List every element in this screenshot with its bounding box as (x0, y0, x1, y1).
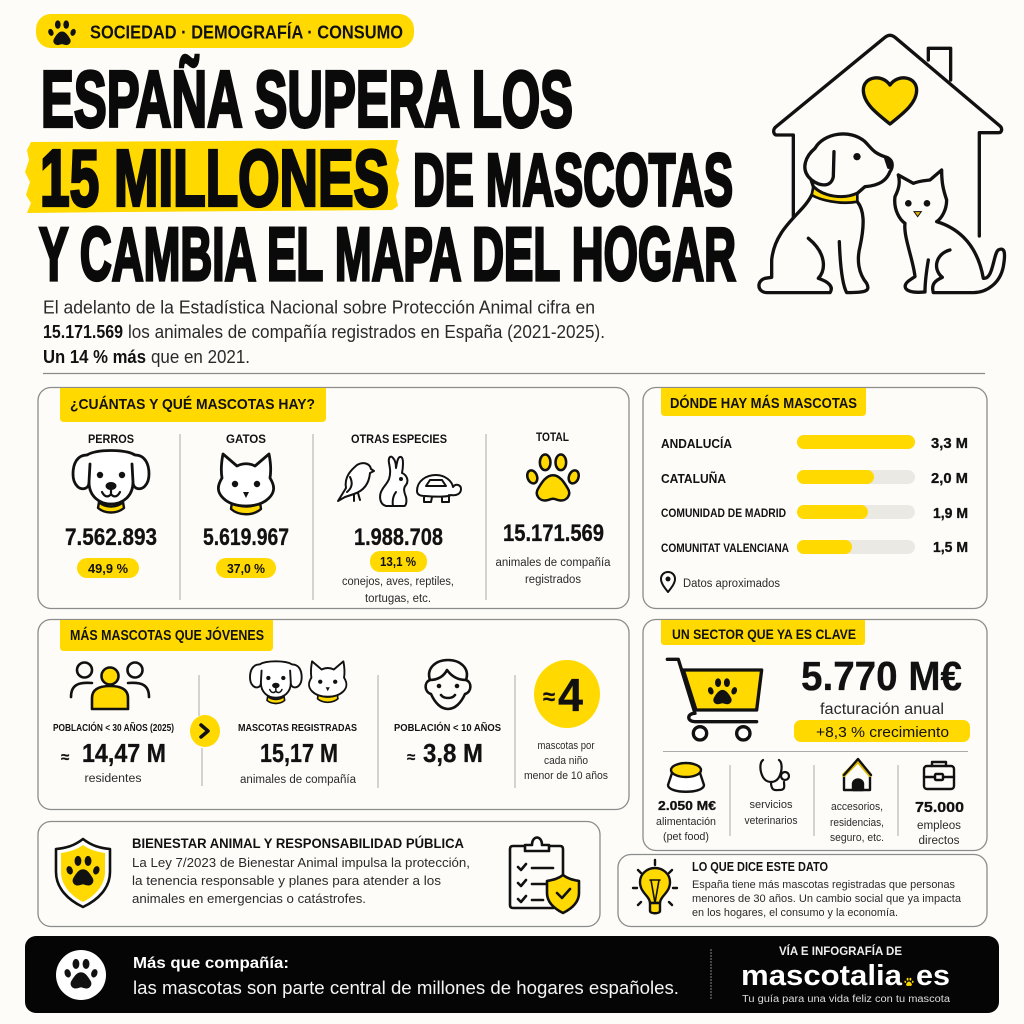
callout: about 4 pets per child: 4 (558, 669, 583, 721)
icon: paw (47, 20, 77, 45)
panel: bienestar animal (38, 822, 600, 926)
arrow: greater than (190, 715, 220, 747)
icon: small yellow paw (904, 978, 914, 986)
column: otras especies: 13,1 % (380, 554, 416, 569)
panel heading: ¿CUÁNTAS Y QUÉ MASCOTAS HAY? (70, 396, 315, 413)
icon: shield with paw (56, 839, 110, 907)
callout: about 4 pets per child (524, 660, 608, 782)
bar: Comunitat Valenciana: COMUNITAT VALENCIANA (661, 543, 789, 555)
column: gatos: 37,0 % (227, 561, 265, 576)
item: alimentación: (pet food) (663, 831, 709, 843)
panel heading: MÁS MASCOTAS QUE JÓVENES (70, 626, 264, 644)
bar: Comunitat Valenciana: 1,5 M (933, 540, 968, 556)
footer message (133, 955, 679, 998)
column: otras especies: conejos, aves, reptiles, (342, 576, 454, 588)
footer message: las mascotas son parte central de millones de hogares españoles. (133, 978, 679, 998)
bar: Cataluña: 2,0 M (931, 471, 968, 487)
text block: animales en emergencias o catástrofes. (132, 891, 366, 906)
column: otras especies (338, 432, 461, 605)
text block: La Ley 7/2023 de Bienestar Animal impulsa la protección, (132, 855, 470, 870)
title line 2 highlighted: 15 MILLONES (40, 134, 389, 222)
item: alimentación: 2.050 M€ (658, 798, 716, 813)
icon: boy face (426, 660, 470, 709)
bar: Comunitat Valenciana (661, 540, 968, 556)
note: approximate data: Datos aproximados (683, 578, 780, 590)
item: accesorios: seguro, etc. (830, 832, 884, 844)
column: población menor de 30 (53, 662, 174, 785)
panel heading: UN SECTOR QUE YA ES CLAVE (672, 626, 856, 642)
item: accesorios (830, 759, 884, 844)
column: población menor de 30: 14,47 M (82, 738, 166, 768)
bar: Comunidad de Madrid: COMUNIDAD DE MADRID (661, 508, 786, 520)
bar: Cataluña: CATALUÑA (661, 471, 727, 486)
highlight brush (25, 140, 399, 213)
cat (895, 170, 1005, 293)
intro text (43, 298, 605, 367)
column: gatos (203, 432, 289, 578)
icon: rabbit (380, 457, 407, 506)
intro text: 15.171.569 (43, 322, 123, 342)
column: mascotas registradas: MASCOTAS REGISTRADAS (238, 722, 357, 734)
column: perros: 7.562.893 (65, 524, 157, 551)
growth pill: +8,3 % crecimiento (816, 724, 949, 741)
panel: un sector clave (643, 620, 987, 850)
text block: LO QUE DICE ESTE DATO (692, 860, 828, 874)
item: servicios veterinarios: servicios (750, 799, 793, 811)
column: población menor de 10 (394, 660, 501, 768)
column: población menor de 10: POBLACIÓN < 10 AÑOS (394, 721, 501, 734)
panel: más mascotas que jóvenes (38, 620, 629, 810)
title line 1: ESPAÑA SUPERA LOS (41, 54, 573, 144)
column: gatos: 5.619.967 (203, 524, 289, 551)
icon: paw in circle (56, 950, 106, 1000)
panel heading (661, 620, 865, 645)
column: mascotas registradas (238, 661, 357, 786)
column: total: 15.171.569 (503, 520, 604, 547)
heart (863, 78, 917, 124)
column: población menor de 10: ≈ (407, 749, 415, 766)
panel heading: DÓNDE HAY MÁS MASCOTAS (670, 394, 857, 412)
column: perros: PERROS (88, 432, 134, 446)
icon: clipboard with shield (510, 838, 579, 913)
icon: people (71, 662, 149, 709)
bar: Andalucía: ANDALUCÍA (661, 436, 733, 451)
column: mascotas registradas: 15,17 M (260, 738, 338, 768)
column: perros: 49,9 % (88, 561, 128, 576)
big number: 5.770 M€ (801, 653, 962, 699)
caption: facturación anual (820, 701, 944, 718)
title line 2 rest: DE MASCOTAS (413, 138, 733, 222)
panel: cuántas mascotas (38, 388, 629, 608)
column: mascotas registradas: animales de compañía (240, 774, 357, 786)
panel heading (661, 388, 866, 416)
item: empleos: empleos (917, 820, 961, 832)
text block: la tenencia responsable y planes para atender a los (132, 873, 442, 888)
item: empleos: 75.000 (915, 799, 964, 816)
bar: Comunidad de Madrid (661, 505, 968, 522)
column: población menor de 30: residentes (84, 773, 142, 785)
icon: turtle (417, 475, 461, 502)
item: accesorios: accesorios, (831, 801, 883, 813)
brand block: Tu guía para una vida feliz con tu mascota (742, 994, 950, 1005)
panel heading (60, 620, 273, 651)
icon: bird (338, 463, 374, 501)
column: población menor de 30: POBLACIÓN < 30 AÑOS (2025) (53, 721, 174, 734)
item: servicios veterinarios (744, 760, 798, 827)
item: empleos (915, 762, 964, 847)
hero illustration: house with dog and cat (759, 35, 1005, 293)
brand block: VÍA E INFOGRAFÍA DE (779, 943, 902, 958)
bar: Comunidad de Madrid: 1,9 M (933, 506, 968, 522)
note: approximate data (661, 572, 780, 592)
text block (132, 836, 470, 906)
text block (692, 860, 962, 919)
footer band (25, 936, 999, 1013)
icon: light bulb (633, 860, 677, 913)
callout: about 4 pets per child: ≈ (543, 684, 555, 709)
column: perros (65, 432, 157, 578)
intro text: que en 2021. (151, 347, 250, 367)
column: otras especies: tortugas, etc. (365, 593, 431, 605)
icon: shopping cart (667, 659, 762, 740)
text block: menores de 30 años. Un cambio social que ya impacta (692, 893, 962, 905)
callout: about 4 pets per child: cada niño (544, 755, 588, 767)
brand block: mascotalia (741, 960, 903, 992)
intro text: los animales de compañía registrados en España (2021-2025). (128, 322, 605, 342)
column: gatos: GATOS (226, 432, 266, 446)
panel heading (60, 388, 326, 422)
column: total: registrados (525, 574, 581, 586)
column: total: TOTAL (536, 430, 569, 444)
bar: Cataluña (661, 470, 968, 487)
intro text: Un 14 % más (43, 347, 146, 367)
callout: about 4 pets per child: menor de 10 años (524, 770, 608, 782)
column: población menor de 30: ≈ (61, 749, 69, 766)
panel: dónde hay más mascotas (643, 388, 987, 608)
tag pill: sociedad, demografía, consumo (36, 14, 414, 48)
brand block: es (916, 960, 950, 992)
bar: Andalucía: 3,3 M (931, 436, 968, 452)
item: alimentación: alimentación (656, 816, 716, 828)
item: empleos: directos (918, 835, 960, 847)
tag text: SOCIEDAD · DEMOGRAFÍA · CONSUMO (90, 22, 403, 42)
dog (759, 134, 893, 293)
growth pill (794, 720, 970, 742)
item: alimentación (656, 763, 716, 843)
icon: yellow paw (526, 454, 580, 501)
brand block (741, 943, 950, 1005)
column: total: animales de compañía (496, 557, 611, 569)
text block: España tiene más mascotas registradas que personas (692, 879, 955, 891)
footer message: Más que compañía: (133, 955, 289, 972)
title (25, 54, 736, 296)
intro text: El adelanto de la Estadística Nacional sobre Protección Animal cifra en (43, 298, 595, 318)
column: total (496, 430, 611, 586)
text block: en los hogares, el consumo y la economía. (692, 907, 898, 919)
column: otras especies: 1.988.708 (354, 524, 443, 551)
bar: Andalucía (661, 435, 968, 452)
item: accesorios: residencias, (830, 817, 884, 829)
panel: lo que dice este dato (618, 854, 987, 926)
callout: about 4 pets per child: mascotas por (538, 740, 595, 752)
column: población menor de 10: 3,8 M (423, 738, 483, 768)
item: servicios veterinarios: veterinarios (744, 815, 798, 827)
text block: BIENESTAR ANIMAL Y RESPONSABILIDAD PÚBLICA (132, 836, 464, 851)
column: otras especies: OTRAS ESPECIES (351, 432, 447, 446)
